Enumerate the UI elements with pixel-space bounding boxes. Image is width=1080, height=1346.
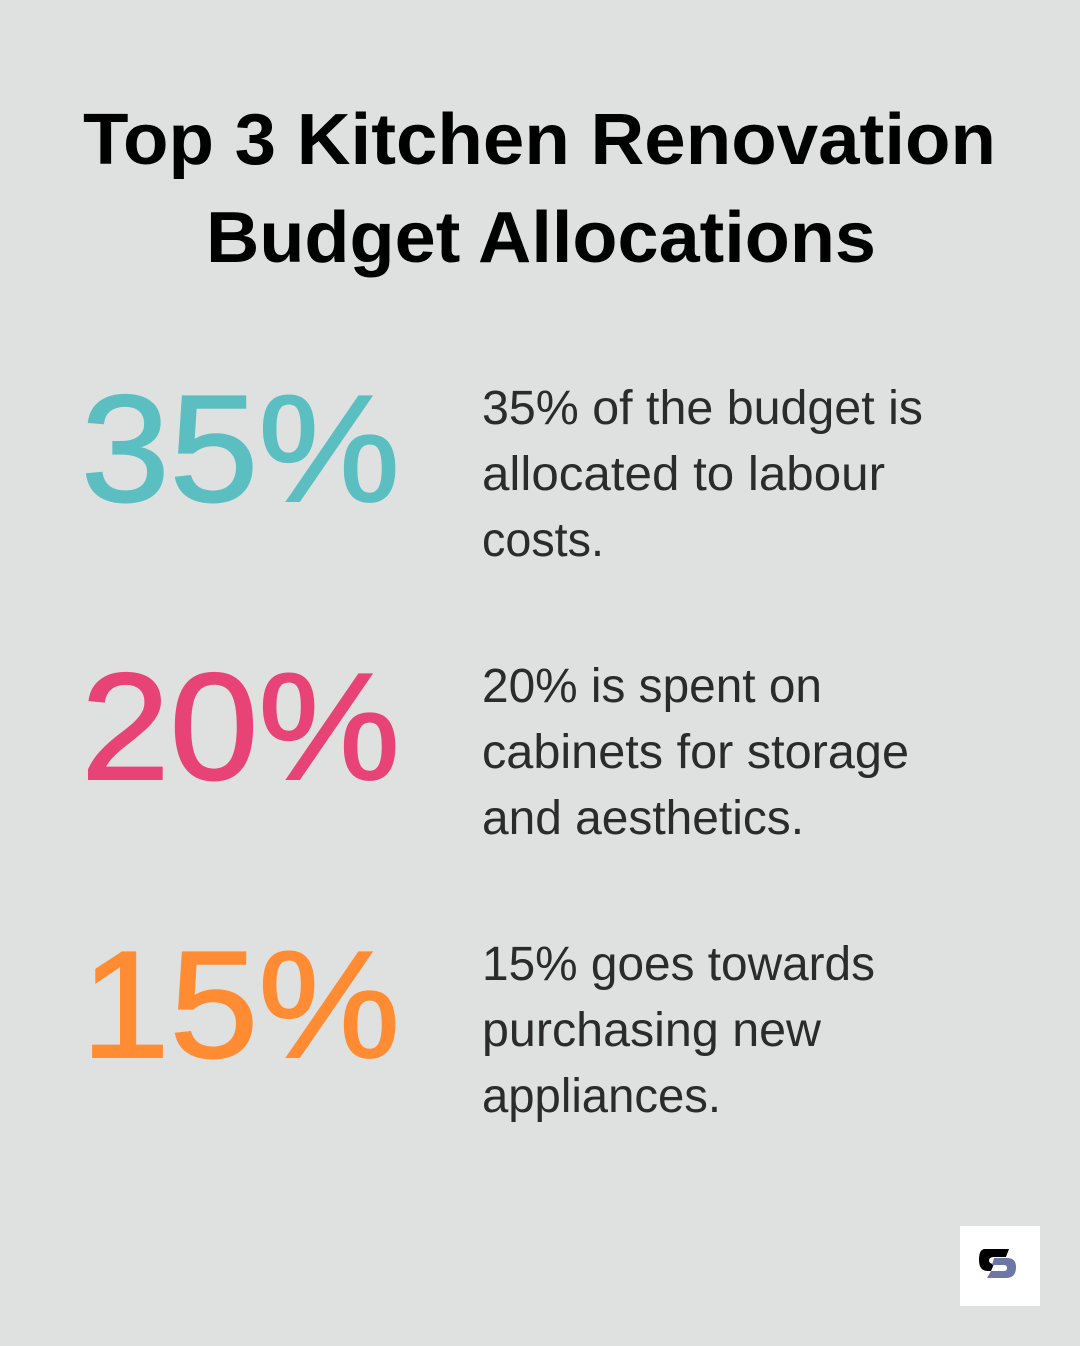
description: cabinets: cabinets for storage bbox=[482, 726, 909, 779]
title: Budget Allocations bbox=[206, 198, 876, 278]
description: labour costs: 35% of the budget is bbox=[482, 382, 923, 435]
stat: 15% appliances bbox=[81, 920, 875, 1123]
number: 15%: 15% bbox=[81, 920, 400, 1090]
number: 20%: 20% bbox=[81, 642, 400, 812]
logo badge bbox=[960, 1226, 1040, 1306]
description: cabinets: 20% is spent on bbox=[482, 660, 822, 713]
title bbox=[83, 100, 996, 278]
description: labour costs bbox=[482, 382, 923, 567]
description: appliances: purchasing new bbox=[482, 1004, 821, 1057]
stat: 20% cabinets bbox=[81, 642, 909, 845]
description: appliances: 15% goes towards bbox=[482, 938, 875, 991]
description: cabinets: and aesthetics. bbox=[482, 792, 804, 845]
number: 35%: 35% bbox=[81, 364, 400, 534]
stat: 35% labour bbox=[81, 364, 923, 567]
title: Top 3 Kitchen Renovation bbox=[83, 100, 996, 180]
description: appliances: appliances. bbox=[482, 1070, 721, 1123]
description: labour costs: costs. bbox=[482, 514, 604, 567]
description: cabinets bbox=[482, 660, 909, 845]
description: appliances bbox=[482, 938, 875, 1123]
description: labour costs: allocated to labour bbox=[482, 448, 885, 501]
